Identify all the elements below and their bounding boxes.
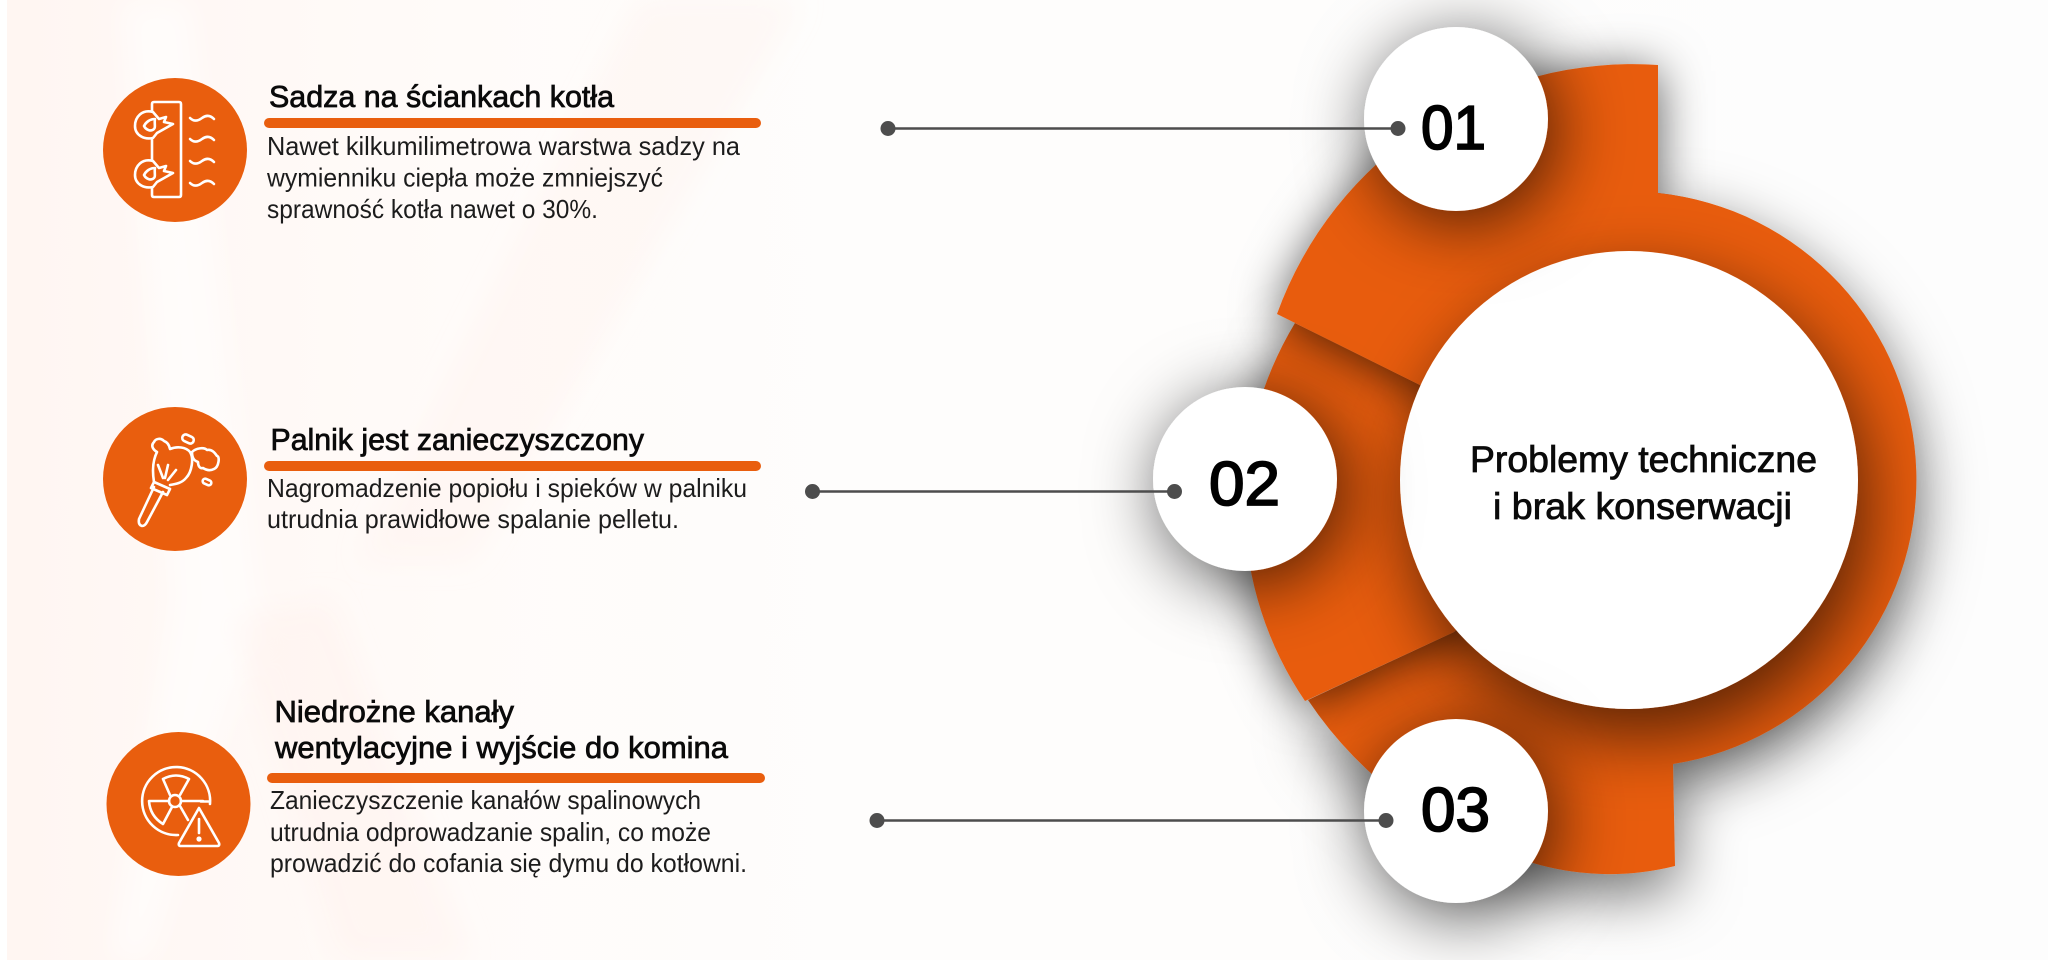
body text: Nagromadzenie popiołu i spieków w palniku xyxy=(267,473,747,503)
heading underline xyxy=(267,773,765,783)
connector 01 xyxy=(880,121,1406,136)
segment 2 xyxy=(1244,323,1629,701)
body text xyxy=(267,473,747,534)
heading: Niedrożne kanały xyxy=(274,694,514,729)
body text: prowadzić do cofania się dymu do kotłowni. xyxy=(270,848,747,878)
body text: Nawet kilkumilimetrowa warstwa sadzy na xyxy=(267,131,741,161)
heading underline xyxy=(264,118,761,128)
centre title: Problemy techniczne xyxy=(1470,439,1817,480)
connector 03 xyxy=(870,813,1394,828)
centre title: i brak konserwacji xyxy=(1493,486,1792,527)
panel: soot on boiler walls xyxy=(103,78,761,224)
icon: brush and dust xyxy=(103,407,247,551)
body text: Zanieczyszczenie kanałów spalinowych xyxy=(270,785,701,815)
panel: dirty burner xyxy=(103,407,761,551)
number badge 02 xyxy=(1153,387,1337,571)
heading xyxy=(274,694,729,765)
centre circle xyxy=(1400,251,1858,709)
panel: blocked ventilation channels xyxy=(106,694,765,878)
body text xyxy=(270,785,747,878)
heading: wentylacyjne i wyjście do komina xyxy=(274,730,729,765)
number badge 03 xyxy=(1364,719,1548,903)
heading: Sadza na ściankach kotła xyxy=(269,79,615,114)
heading underline xyxy=(264,461,761,471)
number badge 03: 03 xyxy=(1421,776,1490,845)
heading: Palnik jest zanieczyszczony xyxy=(270,422,644,457)
ring top patch xyxy=(1658,193,1860,400)
segment 1 xyxy=(1277,64,1658,480)
body text xyxy=(266,131,741,224)
body text: wymienniku ciepła może zmniejszyć xyxy=(266,162,663,192)
connector 02 xyxy=(805,484,1182,499)
icon: boiler with flames xyxy=(103,78,247,222)
body text: utrudnia prawidłowe spalanie pelletu. xyxy=(267,504,679,534)
infographic ring: right arc and segment 3 xyxy=(1308,193,1916,874)
body text: utrudnia odprowadzanie spalin, co może xyxy=(270,817,711,847)
number badge 01 xyxy=(1364,27,1548,211)
number badge 02: 02 xyxy=(1209,450,1280,519)
number badge 01: 01 xyxy=(1421,94,1486,163)
body text: sprawność kotła nawet o 30%. xyxy=(267,194,598,224)
icon: radiation with warning xyxy=(106,732,250,876)
centre title xyxy=(1470,439,1817,527)
